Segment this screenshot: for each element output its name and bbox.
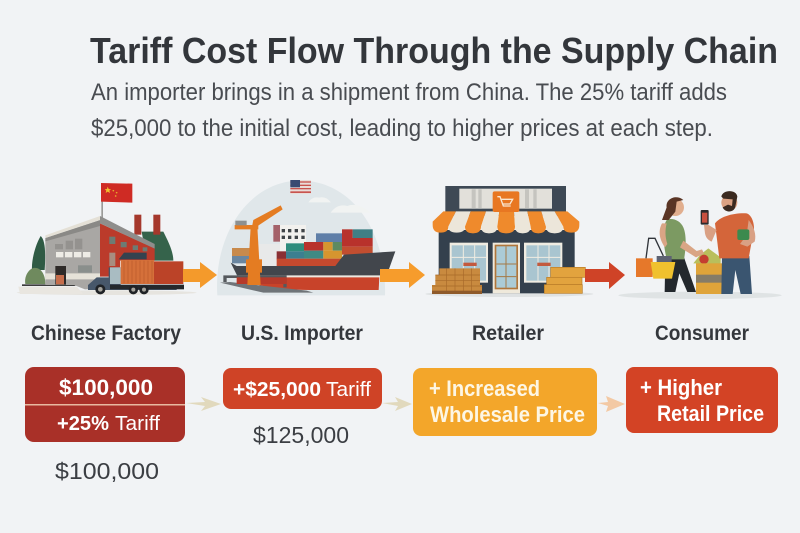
icon: container ship at U.S. port <box>217 180 395 295</box>
building <box>45 225 100 289</box>
arrow: retailer to consumer <box>585 262 625 289</box>
door <box>493 243 520 293</box>
icon: retail storefront <box>425 186 593 297</box>
boxes <box>432 268 482 294</box>
trees <box>32 236 45 270</box>
truck <box>88 267 177 290</box>
arrow: importer to retailer <box>380 262 425 288</box>
cart sign <box>493 191 519 212</box>
subtitle <box>91 79 727 142</box>
value: $125,000: $125,000 <box>253 422 349 448</box>
man <box>721 256 752 294</box>
box: factory price: +25% <box>57 413 109 435</box>
awning scallops <box>433 211 579 233</box>
box: consumer price <box>626 367 778 433</box>
shop body <box>439 230 575 293</box>
flag <box>290 180 311 194</box>
box: retailer increase: Wholesale Price <box>430 402 585 427</box>
label: U.S. Importer: U.S. Importer <box>241 322 363 345</box>
box: importer tariff: +$25,000 <box>233 379 321 401</box>
box: factory price <box>25 367 185 442</box>
icon: consumers shopping <box>618 191 782 299</box>
box: importer tariff <box>223 368 382 409</box>
box: consumer price: + Higher <box>640 375 722 400</box>
box: retailer increase <box>413 368 597 436</box>
crane <box>235 205 283 285</box>
port buildings <box>280 225 306 253</box>
flag <box>101 200 103 218</box>
containers <box>232 229 373 266</box>
arrow: tan connector 1 <box>186 397 221 411</box>
arrow: factory to importer <box>183 262 217 288</box>
subtitle: $25,000 to the initial cost, leading to higher prices at each step. <box>91 115 713 142</box>
box: consumer price: Retail Price <box>657 401 764 426</box>
pier <box>220 282 313 293</box>
title: Tariff Cost Flow Through the Supply Chain <box>90 30 778 71</box>
crates <box>544 267 585 293</box>
box: factory price: Tariff <box>115 413 160 435</box>
windows <box>450 243 488 283</box>
box: factory price: $100,000 <box>59 375 153 400</box>
label: Retailer: Retailer <box>472 322 544 345</box>
box <box>693 248 721 264</box>
value: $100,000: $100,000 <box>55 458 159 484</box>
arrow: tan connector 2 <box>382 397 412 411</box>
box: retailer increase: + Increased <box>429 376 540 401</box>
box: importer tariff: Tariff <box>326 379 371 401</box>
hull <box>231 251 395 276</box>
woman <box>665 257 696 292</box>
baskets <box>636 258 653 277</box>
arrow: peach connector <box>598 396 625 412</box>
chimneys <box>134 215 141 235</box>
label: Consumer: Consumer <box>655 322 749 345</box>
subtitle: An importer brings in a shipment from China. The 25% tariff adds <box>91 79 727 106</box>
label: Chinese Factory: Chinese Factory <box>31 322 181 345</box>
icon: Chinese factory with truck <box>17 183 197 295</box>
